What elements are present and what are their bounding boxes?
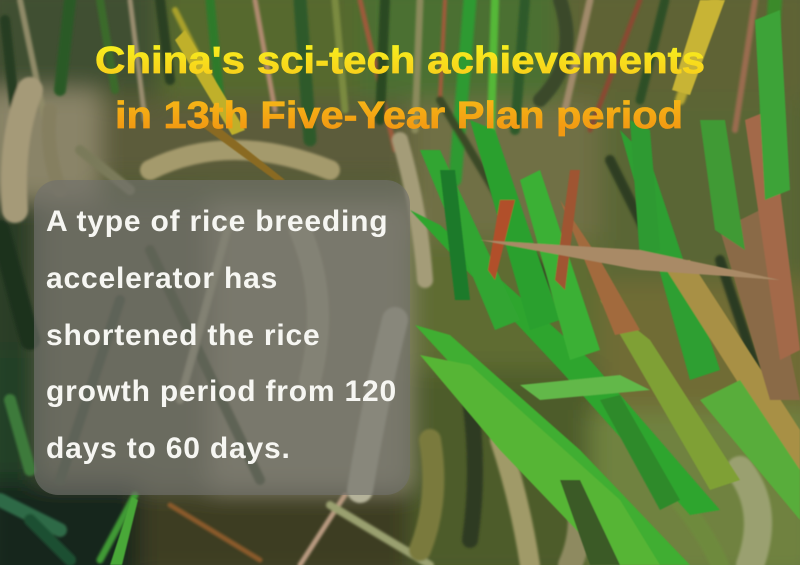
title bbox=[95, 40, 705, 137]
body text: growth period from 120 bbox=[46, 375, 397, 408]
translucent text panel bbox=[34, 180, 410, 495]
body text: A type of rice breeding bbox=[46, 205, 388, 238]
title: China's sci-tech achievements bbox=[95, 40, 705, 82]
title: in 13th Five-Year Plan period bbox=[115, 95, 683, 137]
body text bbox=[46, 205, 397, 465]
body text: days to 60 days. bbox=[46, 432, 291, 465]
body text: accelerator has bbox=[46, 262, 278, 295]
body text: shortened the rice bbox=[46, 319, 320, 352]
